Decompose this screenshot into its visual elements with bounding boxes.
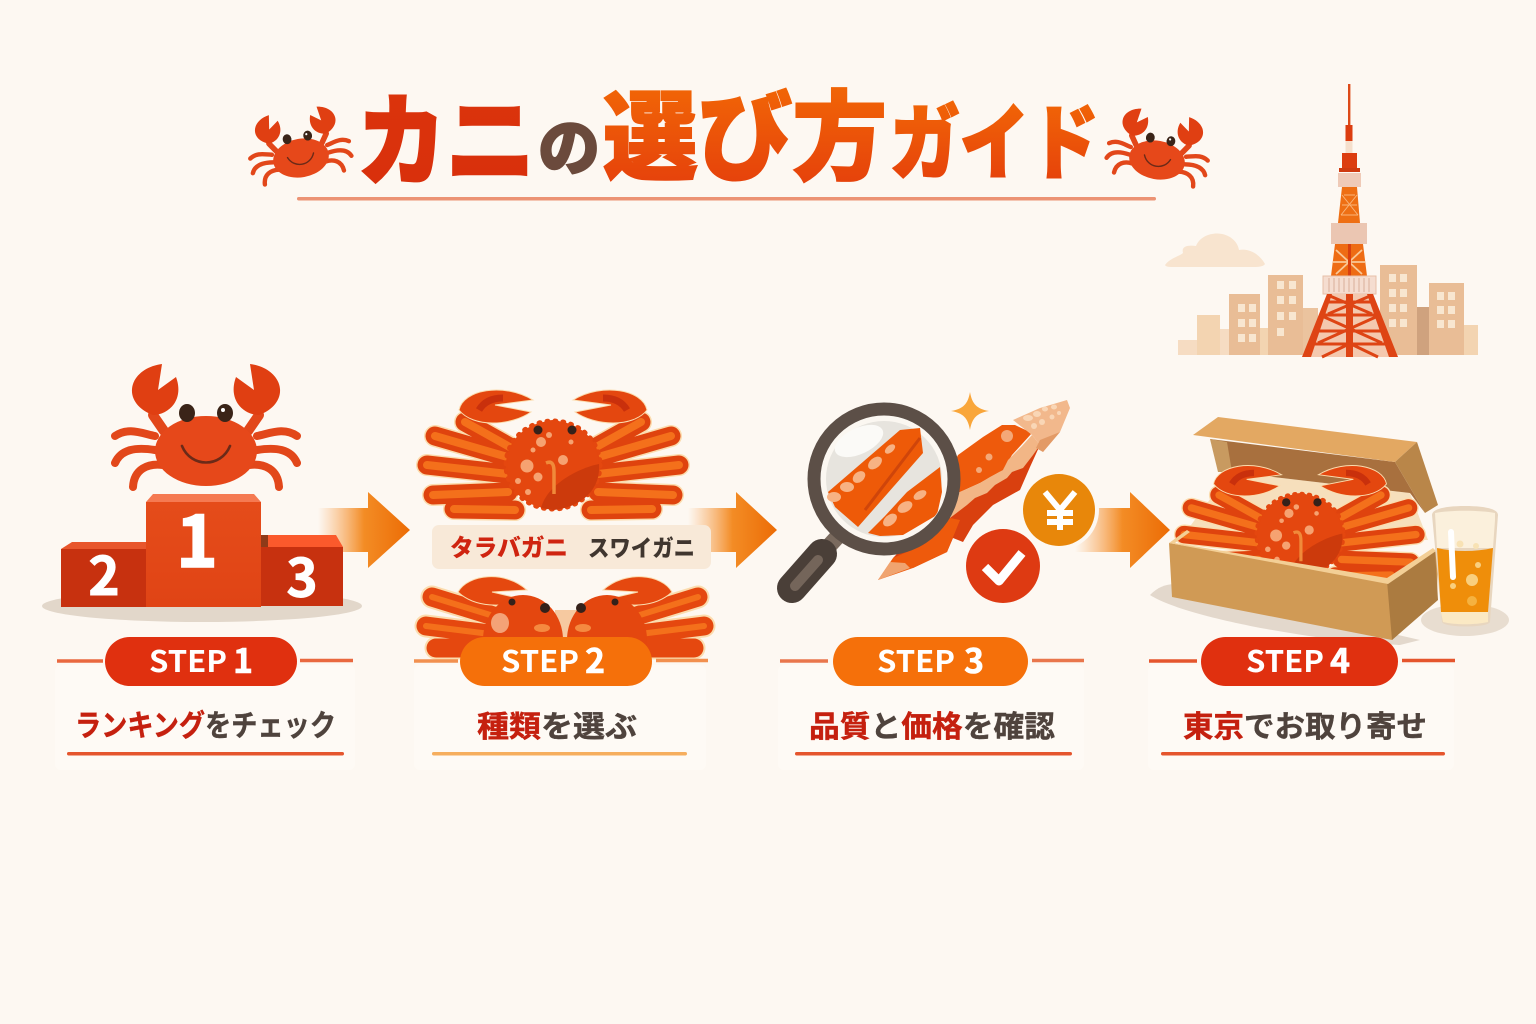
title underline xyxy=(297,197,1156,200)
title xyxy=(243,59,1215,206)
step 4 badge: 4 xyxy=(1330,634,1350,683)
step 2 underline xyxy=(432,752,687,756)
illustration: beer glass xyxy=(1432,506,1498,626)
arrow: step 3 to step 4 xyxy=(1075,492,1170,568)
step 4 badge xyxy=(1201,634,1398,686)
arrow: step 2 to step 3 xyxy=(688,492,777,568)
step 2 badge: 2 xyxy=(585,634,605,683)
Tokyo Tower xyxy=(1302,84,1398,357)
icon: smiling crab xyxy=(115,364,297,487)
buildings xyxy=(1178,265,1478,355)
crab name tag xyxy=(432,525,711,569)
step 4 label: 東京でお取り寄せ xyxy=(1183,702,1427,746)
title text: の: の xyxy=(538,98,600,188)
step 1 badge: STEP xyxy=(149,637,227,681)
icon: title crab left xyxy=(243,102,354,186)
step 4 badge: STEP xyxy=(1246,637,1324,681)
step 2 badge xyxy=(460,634,652,686)
title text: カニ: カニ xyxy=(357,61,535,206)
illustration: king crab xyxy=(427,390,679,510)
podium xyxy=(61,486,343,613)
box shadow xyxy=(1150,584,1420,645)
step 2 badge: STEP xyxy=(501,637,579,681)
crab name tag: スワイガニ xyxy=(588,529,695,563)
step 1 badge: 1 xyxy=(233,634,253,683)
illustration: crab in box xyxy=(1169,417,1438,640)
step 3 connector lines xyxy=(780,659,1084,663)
panel background xyxy=(414,665,706,770)
panel: step 1 ranking xyxy=(42,364,410,770)
step 3 underline xyxy=(795,752,1072,756)
step 3 badge xyxy=(833,634,1028,686)
panel: step 3 quality and price xyxy=(778,392,1170,770)
podium: 3 xyxy=(286,537,318,613)
illustration: magnifying glass xyxy=(792,409,954,588)
arrow: step 1 to step 2 xyxy=(318,492,410,568)
panel: step 2 type selection xyxy=(414,390,777,770)
step 3 label: 品質と価格を確認 xyxy=(809,702,1055,746)
crab name tag: タラバガニ xyxy=(450,528,568,563)
podium shadow xyxy=(42,590,362,622)
title text: 選び方: 選び方 xyxy=(603,59,887,200)
infographic canvas xyxy=(42,84,1509,756)
title text: ガイド: ガイド xyxy=(890,77,1099,196)
step 1 underline xyxy=(67,752,344,756)
icon: sparkle xyxy=(951,392,989,430)
panel background xyxy=(1148,665,1454,770)
step 4 underline xyxy=(1161,752,1445,756)
step 2 label: 種類を選ぶ xyxy=(477,702,637,746)
step 1 label: ランキングをチェック xyxy=(75,701,336,745)
step 3 badge: 3 xyxy=(964,634,984,683)
step 4 connector lines xyxy=(1149,659,1455,663)
illustration: Tokyo skyline with tower xyxy=(1165,84,1478,357)
step 3 badge: STEP xyxy=(877,637,955,681)
icon: check mark xyxy=(963,526,1043,606)
cloud xyxy=(1165,234,1265,267)
panel background xyxy=(778,665,1084,770)
illustration: crab leg xyxy=(878,400,1070,580)
illustration: snow crabs xyxy=(414,576,716,660)
podium: 1 xyxy=(176,486,218,588)
podium: 2 xyxy=(88,535,120,611)
step 2 connector lines xyxy=(414,659,708,663)
panel: step 4 order from Tokyo xyxy=(1148,417,1509,770)
illustration: beer shadow xyxy=(1421,604,1509,636)
step 1 badge xyxy=(105,634,297,686)
step 1 connector lines xyxy=(57,659,353,663)
panel background xyxy=(55,665,355,770)
icon: yen coin xyxy=(1019,470,1099,550)
icon: title crab right xyxy=(1104,104,1215,188)
